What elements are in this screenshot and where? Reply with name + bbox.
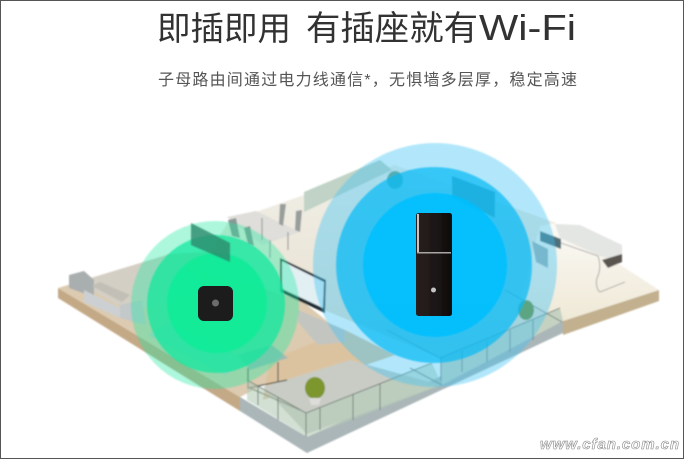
wall picture	[191, 223, 230, 262]
slab sides	[58, 288, 240, 411]
balcony railing	[247, 290, 562, 437]
title	[157, 7, 576, 48]
watermark: www.cfan.com.cn	[540, 436, 679, 453]
title: Wi-Fi	[479, 7, 576, 48]
sofa and cabinets	[69, 271, 250, 375]
tv cabinet	[298, 310, 345, 345]
back wall	[304, 160, 392, 212]
green signal coverage	[131, 221, 299, 389]
title: 有插座就有	[306, 10, 478, 48]
plant on right balcony	[518, 300, 534, 320]
icon: child router	[198, 286, 233, 321]
icon: router button	[431, 288, 436, 292]
apartment floor plan	[58, 160, 659, 453]
coffee table	[238, 345, 300, 410]
plant at back	[387, 171, 403, 189]
balcony glass	[247, 363, 442, 437]
white bench	[540, 224, 625, 292]
blue signal coverage	[313, 143, 557, 387]
artwork at back wall	[452, 176, 495, 218]
chair near bench	[532, 241, 548, 268]
subtitle: 子母路由间通过电力线通信*，无惧墙多层厚，稳定高速	[158, 71, 577, 89]
television	[280, 258, 326, 313]
dining table and chairs	[227, 204, 302, 258]
icon: router logo	[212, 300, 219, 306]
icon: parent router	[416, 213, 452, 316]
floor surfaces	[58, 250, 350, 397]
title: 即插即用	[157, 10, 291, 47]
plant on balcony	[305, 377, 325, 405]
